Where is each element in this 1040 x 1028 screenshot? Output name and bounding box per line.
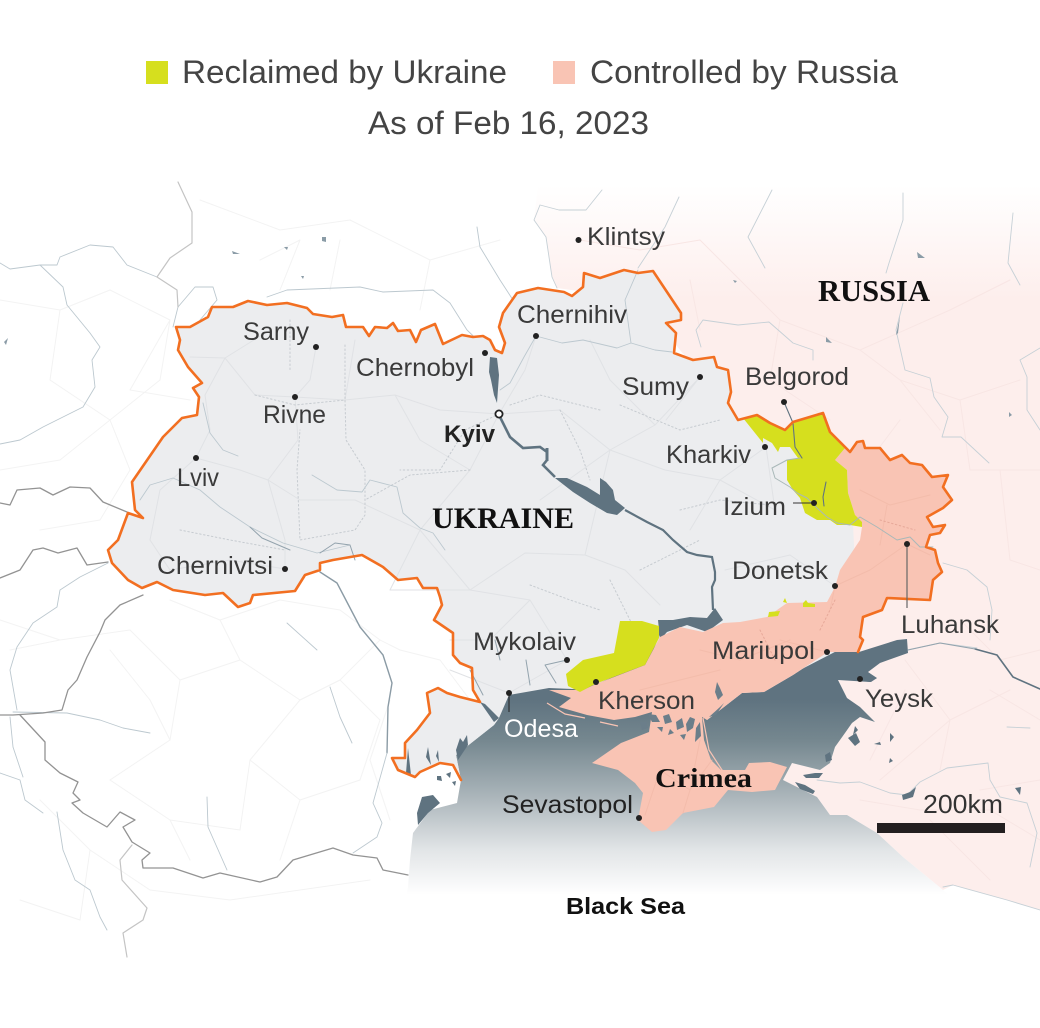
city: Mykolaiv: Mykolaiv (473, 628, 577, 656)
background roads and rivers (0, 182, 1040, 957)
scale label: 200km (923, 789, 1003, 819)
Dnipro channel lower (625, 510, 715, 610)
reclaimed area: Kherson (566, 621, 659, 692)
date line: As of Feb 16, 2023 (368, 105, 649, 141)
city: Belgorod (745, 363, 849, 405)
legend swatch: reclaimed (146, 61, 168, 84)
city: Donetsk: Donetsk (732, 557, 829, 585)
Ukraine border (108, 270, 952, 780)
label: Black Sea: Black Sea (566, 893, 685, 919)
roads in occupied territory (600, 490, 930, 815)
city: Chernobyl: Chernobyl (356, 354, 474, 382)
legend (146, 54, 898, 141)
scale bar (877, 789, 1005, 833)
Arabat Spit and Kinburn Spit (547, 703, 730, 776)
Dnipro to Kherson (575, 630, 660, 690)
city: Luhansk: Luhansk (901, 611, 1000, 639)
city: Mariupol: Mariupol (712, 637, 815, 665)
reclaimed area: Kharkiv (743, 413, 862, 527)
city: Lviv: Lviv (177, 464, 219, 492)
city: Kherson: Kherson (598, 687, 695, 715)
Kremenchuk reservoir (555, 478, 625, 515)
city: Sarny: Sarny (243, 318, 310, 346)
city: Yeysk: Yeysk (865, 685, 934, 713)
Ukraine territory (108, 270, 858, 780)
city: Yeysk (857, 676, 934, 713)
city: Belgorod: Belgorod (745, 363, 849, 391)
Black Sea and Sea of Azov (400, 639, 990, 930)
Dnipro river and reservoirs (489, 357, 723, 690)
Kakhovka reservoir (658, 608, 723, 640)
wetlands and lagoons (406, 677, 1021, 825)
rivers crossing reclaimed area (772, 402, 1040, 689)
city: Odesa (504, 690, 578, 743)
city: Klintsy: Klintsy (587, 223, 666, 251)
city: Sumy: Sumy (622, 373, 690, 401)
city: Chernihiv: Chernihiv (517, 301, 628, 329)
Ukraine internal roads and rivers (140, 270, 835, 695)
Kyiv reservoir (489, 357, 499, 403)
label: RUSSIA: RUSSIA (818, 273, 931, 308)
Sivash wetlands (640, 682, 724, 742)
scale rule (877, 823, 1005, 833)
city: Kharkiv: Kharkiv (666, 441, 751, 469)
legend label: controlled: Controlled by Russia (590, 54, 898, 90)
reclaimed area: Donetsk slivers (768, 598, 815, 617)
city: Chernivtsi: Chernivtsi (157, 552, 273, 580)
Dnipro channel middle (546, 448, 548, 461)
city: Luhansk (901, 541, 1000, 639)
city: Odesa: Odesa (504, 715, 578, 743)
city: Sevastopol: Sevastopol (502, 791, 633, 819)
city: Rivne: Rivne (263, 401, 326, 429)
occupied territory (549, 441, 952, 832)
capital: Kyiv (444, 410, 503, 448)
legend swatch: controlled (553, 61, 575, 84)
legend label: reclaimed: Reclaimed by Ukraine (182, 54, 507, 90)
label: UKRAINE: UKRAINE (432, 502, 574, 535)
northern ponds (4, 237, 1012, 417)
city: Izium: Izium (723, 493, 786, 521)
label: Crimea: Crimea (655, 763, 753, 793)
capital: Kyiv: Kyiv (444, 421, 496, 448)
Dnipro channel upper (499, 415, 555, 477)
Russia land area (534, 185, 1040, 910)
city: Izium (723, 493, 817, 521)
